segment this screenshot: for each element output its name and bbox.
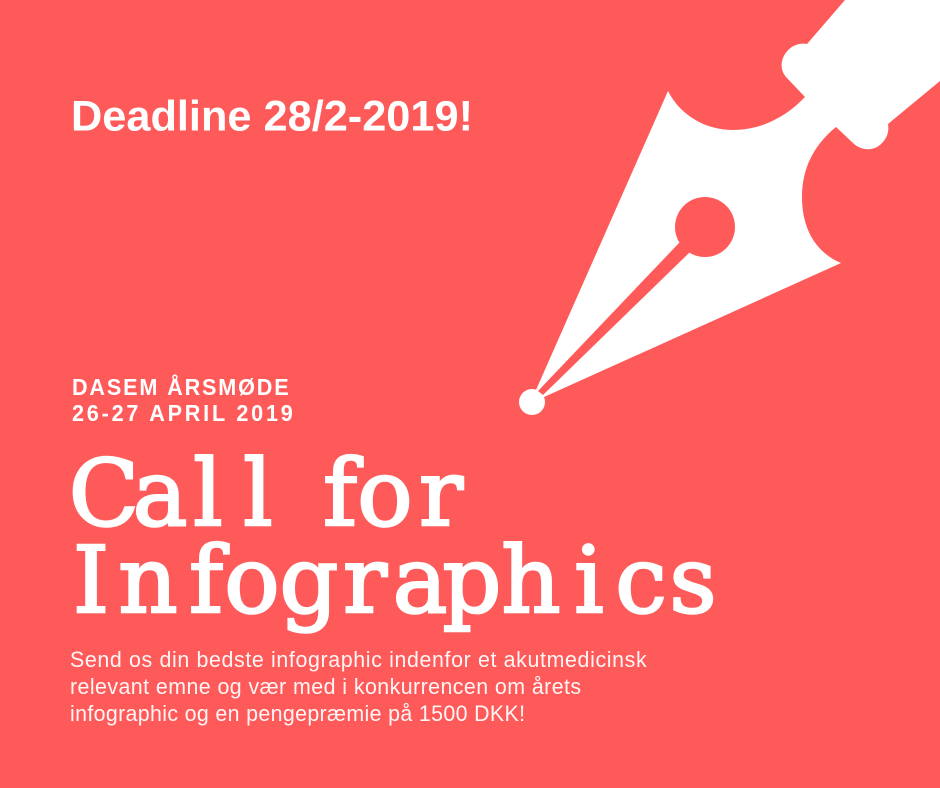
body text: Send os din bedste infographic indenfor et akutmedicinsk — [70, 646, 647, 672]
icon: fountain pen nib — [519, 0, 940, 415]
subheading: event name and date — [72, 373, 293, 426]
title: Call for Infographics: Infographics — [73, 527, 717, 634]
subheading: event name and date: DASEM ÅRSMØDE — [72, 373, 289, 400]
title: Call for Infographics — [69, 440, 717, 634]
body text: relevant emne og vær med i konkurrencen om årets — [70, 673, 581, 699]
heading: deadline: Deadline 28/2-2019! — [71, 92, 473, 140]
body text: infographic og en pengepræmie på 1500 DKK! — [70, 700, 525, 726]
title: Call for Infographics: Callfor — [69, 440, 463, 547]
subheading: event name and date: 26-27 APRIL 2019 — [72, 400, 293, 426]
body text — [70, 646, 647, 726]
